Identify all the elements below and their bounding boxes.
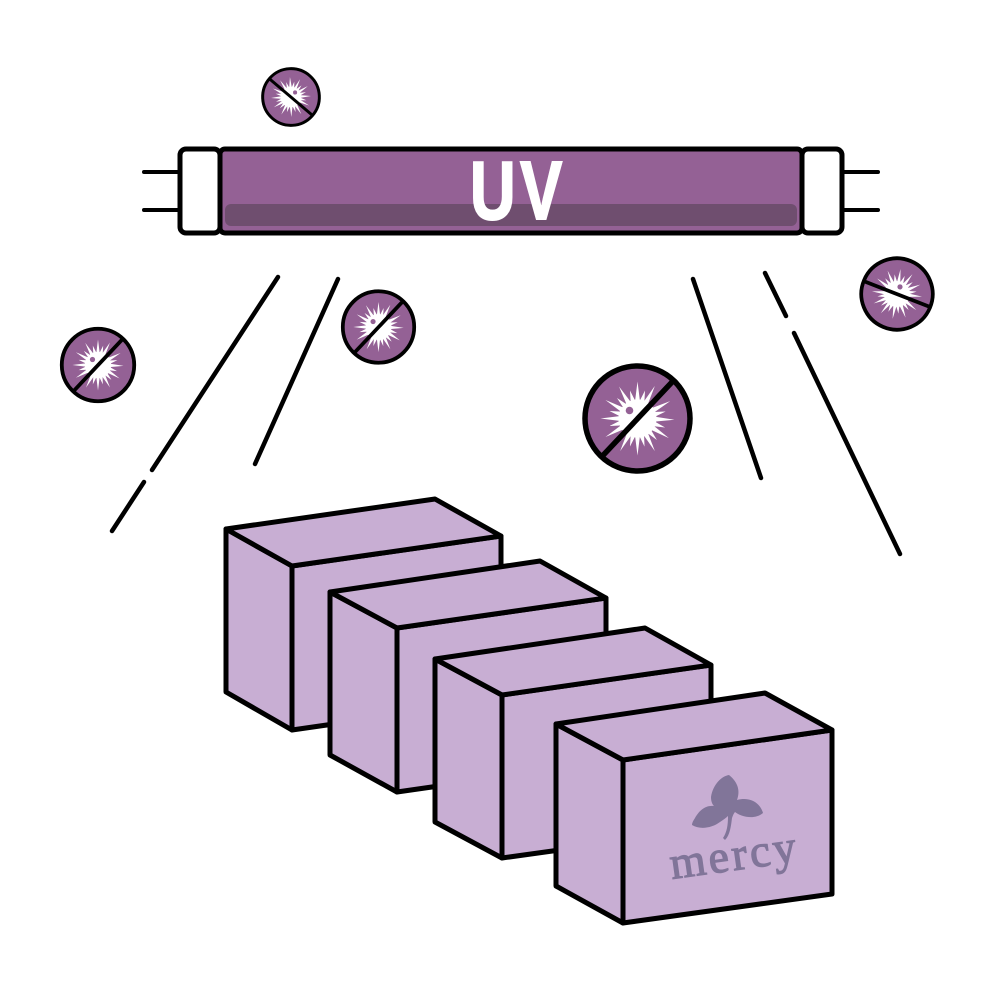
icon: virus right [851, 248, 943, 340]
left end cap [180, 149, 220, 233]
box 1 (rear) [226, 499, 501, 730]
lamp shadow band [225, 204, 797, 226]
brand name: mercy [666, 820, 802, 889]
UV light rays [112, 273, 900, 554]
box 3 [435, 628, 711, 858]
UV label: UV [470, 144, 567, 237]
logo: mercy [666, 775, 802, 889]
lamp glass [220, 149, 802, 233]
icon: virus far left [62, 329, 134, 401]
box 2 [330, 561, 606, 792]
right lamp pins [840, 172, 878, 210]
icon: virus middle left [343, 291, 414, 363]
box 4 (front, with logo) [556, 693, 832, 923]
icon: UV tube lamp [144, 144, 878, 237]
icon: virus top [261, 67, 321, 127]
icon: virus large centre [585, 366, 690, 471]
icon: three-petal leaf [692, 775, 763, 840]
right end cap [802, 149, 842, 233]
left lamp pins [144, 172, 182, 210]
